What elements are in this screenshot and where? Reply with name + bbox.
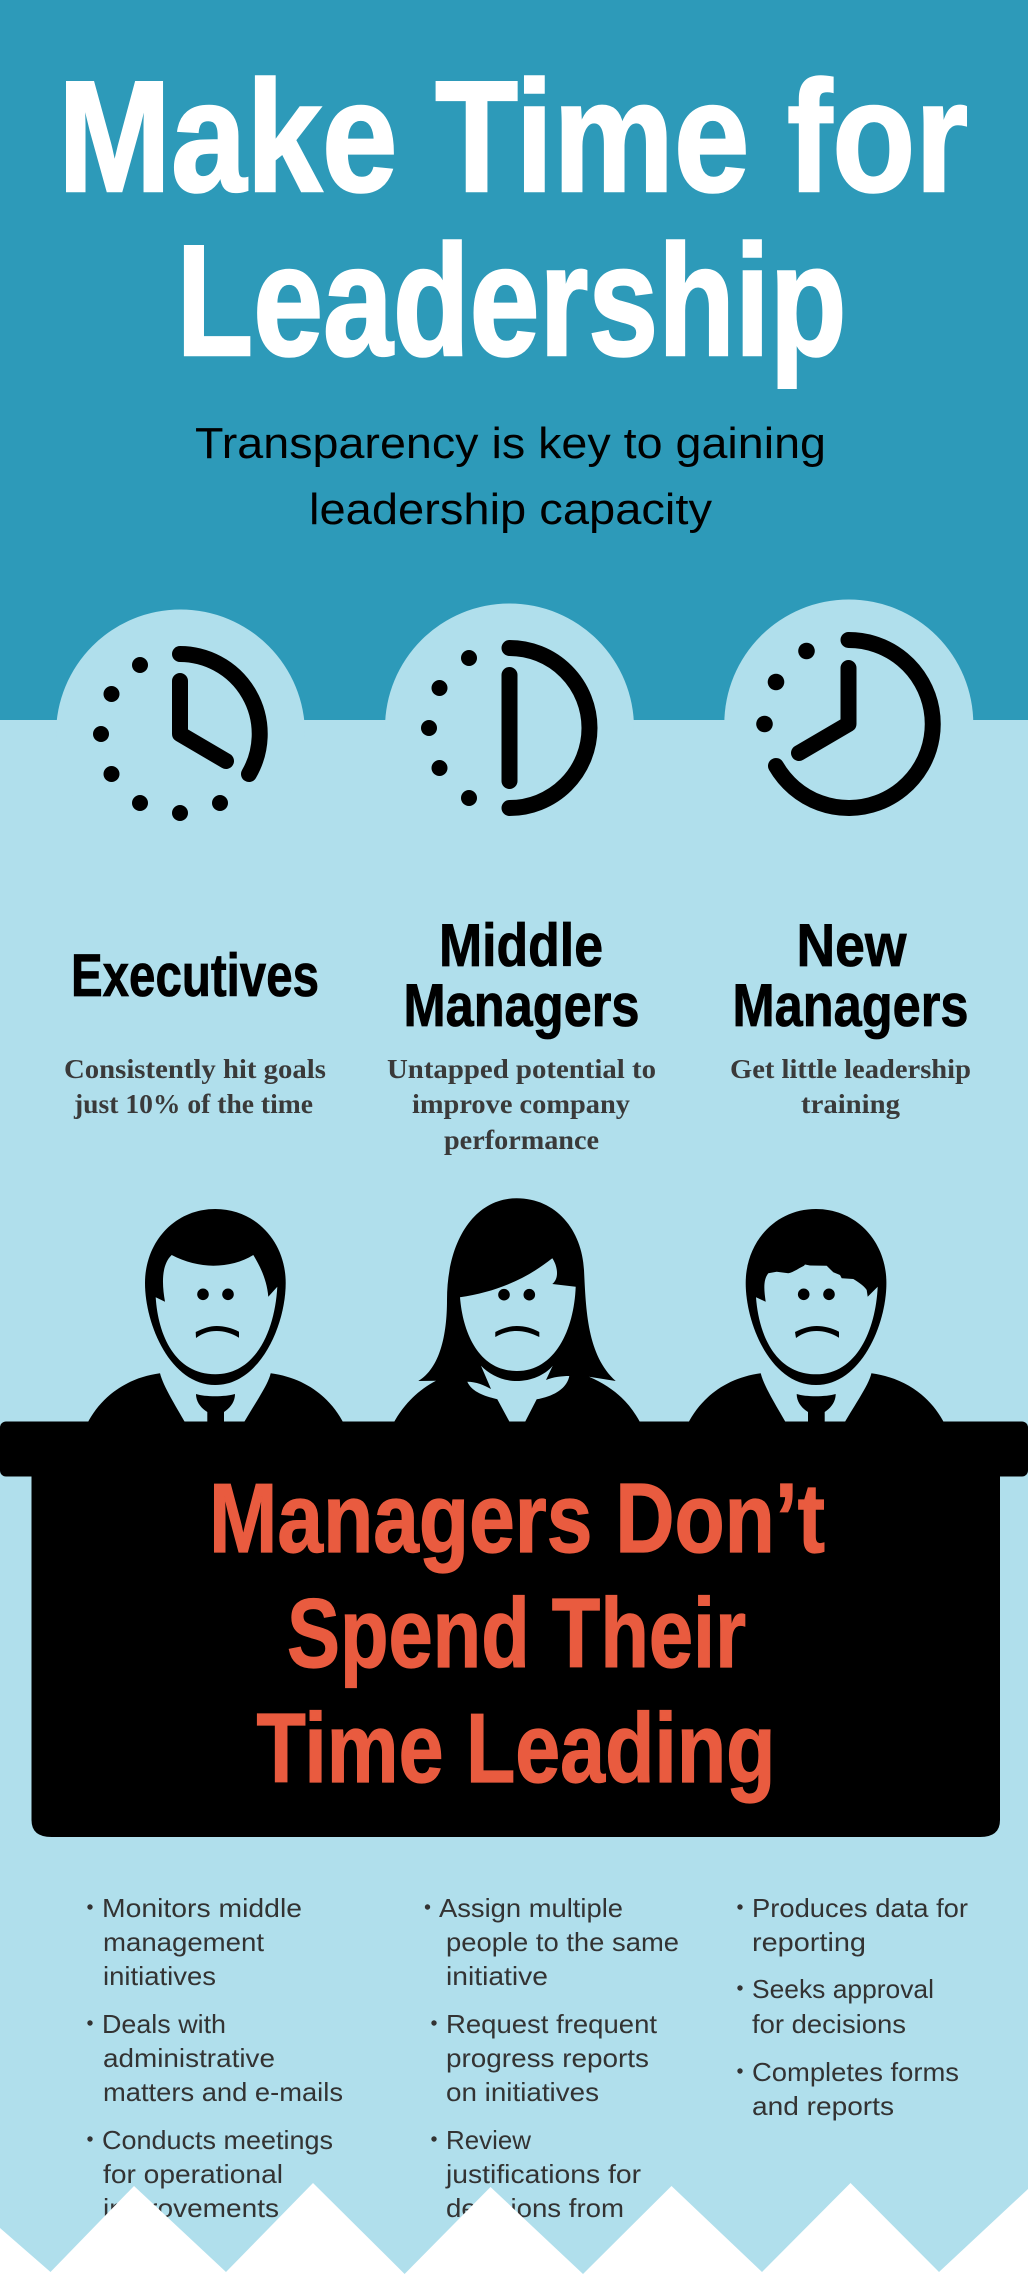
subtitle: leadership capacity [309,486,712,534]
bullet list: middle manager tasks: initiative [446,1961,548,1991]
bullet list: middle manager tasks: people to the same [446,1927,679,1957]
bullet list: middle manager tasks: Review [446,2125,531,2155]
bullet list: executives tasks: Conducts meetings [102,2125,333,2155]
description: middle managers: improve company [412,1089,631,1119]
bullet list: middle manager tasks: decisions from [446,2193,624,2223]
description: new managers [730,1054,971,1119]
heading: middle managers: Managers [404,972,640,1039]
panel: teal header band [0,0,1028,720]
bullet list: middle manager tasks: Request frequent [446,2009,658,2039]
subtitle: Transparency is key to gaining [195,420,826,468]
subtitle [195,420,826,534]
bullet list: middle manager tasks: Assign multiple [439,1893,623,1923]
icon: executives clock [93,654,260,821]
column: new managers [730,912,971,1119]
figure: female middle manager [393,1198,641,1424]
clock tab backgrounds [56,600,973,858]
bullet list: executives tasks: administrative [103,2043,275,2073]
title [58,49,968,389]
icon: middle managers clock [421,648,590,808]
bullet list: middle manager tasks: progress reports [446,2043,649,2073]
description: middle managers: Untapped potential to [387,1054,656,1084]
desk heading: Managers Don’t [209,1463,825,1573]
description: new managers: training [801,1089,901,1119]
bullet list: executives tasks: matters and e-mails [103,2077,343,2107]
panel: black desk [0,1422,1028,1837]
heading: executives: Executives [71,942,319,1009]
title: Leadership [176,213,846,389]
bullet list: new manager tasks: reporting [752,1927,866,1957]
bullet list: new manager tasks: and reports [752,2091,894,2121]
bullet list: executives tasks: Deals with [102,2009,226,2039]
torn zigzag bottom edge [0,2183,1028,2275]
heading: middle managers [404,912,640,1039]
column: middle managers [387,912,656,1155]
bullet list: executives tasks [87,1893,343,2223]
heading: middle managers: Middle [439,912,603,979]
bullet list: executives tasks: for operational [103,2159,283,2189]
description: executives: just 10% of the time [73,1089,313,1119]
bullet list: middle manager tasks: on initiatives [446,2077,599,2107]
heading: new managers: Managers [732,972,968,1039]
heading: new managers: New [796,912,907,979]
column: executives [64,942,326,1119]
bullet list: new manager tasks: Produces data for [752,1893,968,1923]
figure: young new manager [688,1209,945,1424]
bullet list: executives tasks: improvements [103,2193,279,2223]
figure: male executive [87,1209,344,1424]
desk heading [209,1463,825,1803]
bullet list: executives tasks: initiatives [103,1961,216,1991]
bullet list: middle manager tasks: justifications for [445,2159,641,2189]
description: new managers: Get little leadership [730,1054,971,1084]
description: middle managers [387,1054,656,1155]
bullet list: executives tasks: Monitors middle [102,1893,302,1923]
bullet list: new manager tasks: for decisions [752,2009,906,2039]
description: executives [64,1054,326,1119]
desk heading: Time Leading [256,1693,776,1803]
description: executives: Consistently hit goals [64,1054,326,1084]
icon: new managers clock [756,640,933,808]
description: middle managers: performance [444,1125,599,1155]
bullet list: middle manager tasks [425,1893,679,2223]
bullet list: executives tasks: management [103,1927,265,1957]
bullet list: new manager tasks: Seeks approval [752,1974,934,2004]
bullet list: new manager tasks [737,1893,968,2121]
bullet list: new manager tasks: Completes forms [752,2057,959,2087]
desk heading: Spend Their [287,1578,746,1688]
heading: new managers [732,912,968,1039]
